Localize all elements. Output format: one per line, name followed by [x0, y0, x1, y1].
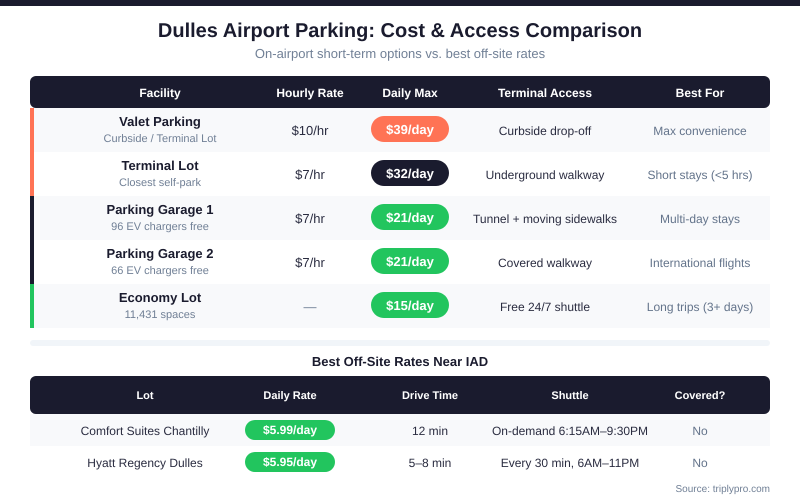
- row: parking garage 2: $21/day: [386, 254, 434, 269]
- row: valet parking: [30, 108, 770, 152]
- table: on-airport header: Terminal Access: [498, 86, 592, 100]
- row: parking garage 2: International flights: [650, 256, 750, 270]
- row: valet parking: Valet Parking: [119, 114, 201, 129]
- row: comfort suites: On-demand 6:15AM–9:30PM: [492, 424, 648, 438]
- row: terminal lot: Short stays (<5 hrs): [647, 168, 753, 182]
- row: economy lot: [30, 284, 770, 328]
- row: parking garage 1: Tunnel + moving sidewalks: [473, 212, 617, 226]
- row: terminal lot: $32/day: [386, 166, 434, 181]
- row: parking garage 1: [30, 196, 770, 240]
- row: parking garage 2: [30, 240, 750, 284]
- row: economy lot: Long trips (3+ days): [647, 300, 753, 314]
- subtitle: On-airport short-term options vs. best off-site rates: [255, 46, 545, 61]
- row: hyatt regency: 5–8 min: [409, 456, 451, 470]
- table: off-site header: Covered?: [675, 390, 725, 402]
- table: off-site header: Daily Rate: [263, 390, 317, 402]
- row: parking garage 1: $7/hr: [295, 211, 325, 226]
- row: terminal lot: [30, 152, 753, 196]
- row: valet parking: $10/hr: [292, 123, 328, 138]
- section heading: off-site: Best Off-Site Rates Near IAD: [312, 354, 488, 369]
- row: economy lot: Economy Lot: [119, 290, 201, 305]
- row: comfort suites: $5.99/day: [263, 423, 317, 437]
- row: terminal lot: $7/hr: [295, 167, 325, 182]
- table: on-airport header: Best For: [676, 86, 724, 100]
- table: off-site header: Lot: [136, 390, 154, 402]
- table: on-airport header: [30, 76, 770, 108]
- row: comfort suites: Comfort Suites Chantilly: [81, 424, 209, 438]
- top bar: [0, 0, 800, 6]
- table: off-site header: Drive Time: [402, 390, 458, 402]
- row: economy lot: $15/day: [386, 298, 434, 313]
- row: hyatt regency: No: [692, 456, 708, 470]
- row: parking garage 2: Parking Garage 2: [107, 246, 213, 261]
- row: parking garage 1: 96 EV chargers free: [111, 221, 209, 233]
- row: parking garage 1: Multi-day stays: [660, 212, 740, 226]
- row: hyatt regency: [87, 452, 708, 472]
- row: terminal lot: Terminal Lot: [121, 158, 199, 173]
- row: economy lot: 11,431 spaces: [125, 309, 195, 321]
- row: parking garage 2: 66 EV chargers free: [111, 265, 209, 277]
- row: hyatt regency: Every 30 min, 6AM–11PM: [501, 456, 639, 470]
- row: parking garage 1: Parking Garage 1: [107, 202, 213, 217]
- table: on-airport header: Facility: [139, 86, 181, 100]
- row: valet parking: Curbside drop-off: [499, 124, 591, 138]
- source note: Source: triplypro.com: [676, 484, 770, 495]
- table: off-site header: Shuttle: [551, 390, 589, 402]
- table: on-airport header: Hourly Rate: [276, 86, 344, 100]
- row: comfort suites: No: [692, 424, 708, 438]
- row: valet parking: Max convenience: [653, 124, 747, 138]
- row: valet parking: Curbside / Terminal Lot: [104, 133, 216, 145]
- row: parking garage 2: Covered walkway: [498, 256, 592, 270]
- row: terminal lot: Closest self-park: [119, 177, 201, 189]
- row: terminal lot: Underground walkway: [486, 168, 604, 182]
- row: economy lot: —: [304, 299, 316, 314]
- row: economy lot: Free 24/7 shuttle: [500, 300, 590, 314]
- table: on-airport header: Daily Max: [382, 86, 438, 100]
- row: comfort suites: [30, 414, 770, 446]
- row: comfort suites: 12 min: [412, 424, 448, 438]
- row: valet parking: $39/day: [386, 122, 434, 137]
- row: hyatt regency: Hyatt Regency Dulles: [87, 456, 203, 470]
- row: parking garage 2: $7/hr: [295, 255, 325, 270]
- row: parking garage 1: $21/day: [386, 210, 434, 225]
- row: hyatt regency: $5.95/day: [263, 455, 317, 469]
- table: off-site header: [30, 376, 770, 414]
- title: Dulles Airport Parking: Cost & Access Comparison: [158, 20, 642, 42]
